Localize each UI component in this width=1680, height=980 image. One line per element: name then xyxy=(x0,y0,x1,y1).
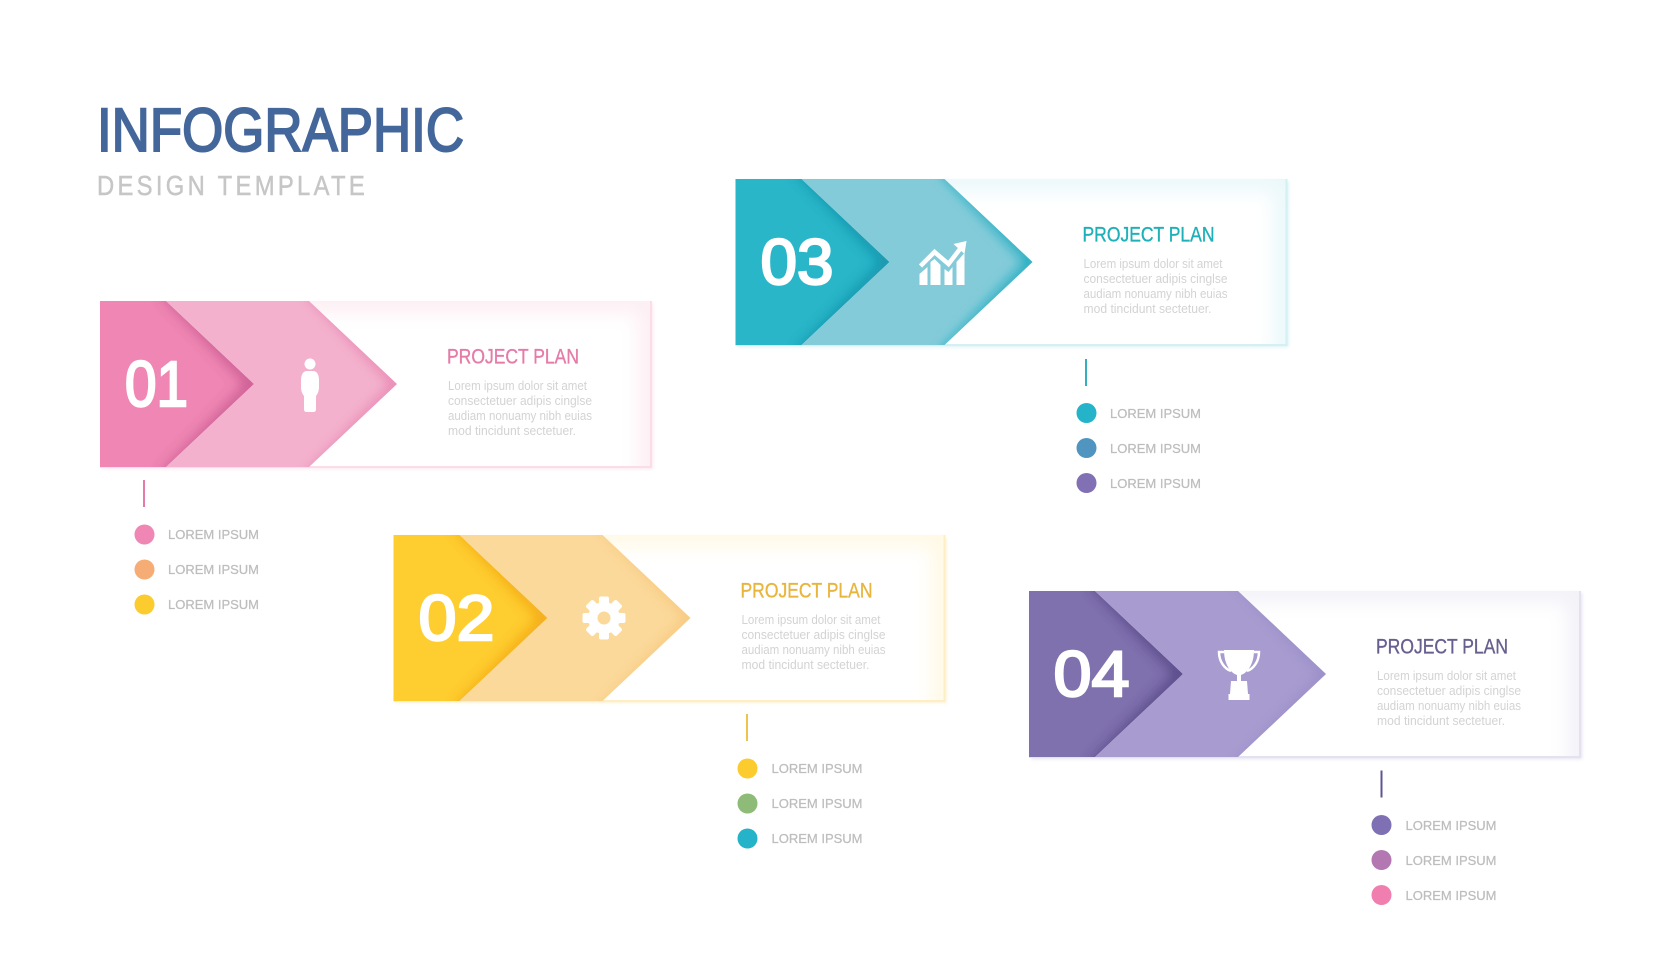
body text: audiam nonuamy nibh euias xyxy=(1084,286,1228,301)
body text: Lorem ipsum dolor sit amet xyxy=(448,378,587,393)
icon: trophy xyxy=(1219,650,1259,700)
body text: audiam nonuamy nibh euias xyxy=(448,408,592,423)
connector and list: step 01: LOREM IPSUM xyxy=(168,597,259,612)
step number 01: 01 xyxy=(125,348,188,420)
body text xyxy=(448,378,592,438)
panel: step 01 xyxy=(100,301,654,470)
step number 02: 02 xyxy=(418,582,494,654)
icon: growth chart xyxy=(920,241,966,285)
heading: PROJECT PLAN xyxy=(740,580,872,602)
body text xyxy=(1084,256,1228,316)
connector and list: step 01: LOREM IPSUM xyxy=(168,527,259,542)
connector and list: step 04 xyxy=(1372,770,1496,905)
connector and list: step 02 xyxy=(738,714,862,848)
connector and list: step 04: LOREM IPSUM xyxy=(1406,888,1496,903)
connector and list: step 02: LOREM IPSUM xyxy=(772,796,862,811)
step number 03: 03 xyxy=(760,226,834,298)
body text: Lorem ipsum dolor sit amet xyxy=(1084,256,1223,271)
body text xyxy=(742,612,886,672)
connector and list: step 03: LOREM IPSUM xyxy=(1110,406,1201,421)
connector and list: step 02: LOREM IPSUM xyxy=(772,831,862,846)
body text: consectetuer adipis cinglse xyxy=(742,627,886,642)
connector and list: step 03: LOREM IPSUM xyxy=(1110,441,1201,456)
subtitle: DESIGN TEMPLATE xyxy=(97,169,365,201)
body text: mod tincidunt sectetuer. xyxy=(1377,713,1505,728)
body text: consectetuer adipis cinglse xyxy=(1084,271,1228,286)
body text: mod tincidunt sectetuer. xyxy=(742,657,870,672)
body text xyxy=(1377,668,1521,728)
heading: PROJECT PLAN xyxy=(1376,636,1508,658)
title: INFOGRAPHIC xyxy=(97,96,464,164)
body text: audiam nonuamy nibh euias xyxy=(742,642,886,657)
body text: consectetuer adipis cinglse xyxy=(1377,683,1521,698)
icon: person xyxy=(301,358,319,412)
connector and list: step 02: LOREM IPSUM xyxy=(772,761,862,776)
icon: gear xyxy=(582,596,626,640)
body text: mod tincidunt sectetuer. xyxy=(448,423,576,438)
panel: step 03 xyxy=(736,179,1290,348)
heading: PROJECT PLAN xyxy=(447,346,579,368)
connector and list: step 03 xyxy=(1076,359,1201,493)
connector and list: step 04: LOREM IPSUM xyxy=(1406,853,1496,868)
panel: step 04 xyxy=(1029,591,1583,760)
step number 04: 04 xyxy=(1054,638,1130,710)
body text: mod tincidunt sectetuer. xyxy=(1084,301,1212,316)
body text: Lorem ipsum dolor sit amet xyxy=(1377,668,1516,683)
connector and list: step 01: LOREM IPSUM xyxy=(168,562,259,577)
body text: Lorem ipsum dolor sit amet xyxy=(742,612,881,627)
connector and list: step 01 xyxy=(134,480,259,614)
connector and list: step 03: LOREM IPSUM xyxy=(1110,476,1201,491)
body text: consectetuer adipis cinglse xyxy=(448,393,592,408)
body text: audiam nonuamy nibh euias xyxy=(1377,698,1521,713)
heading: PROJECT PLAN xyxy=(1082,224,1214,246)
panel: step 02 xyxy=(394,535,948,704)
connector and list: step 04: LOREM IPSUM xyxy=(1406,818,1496,833)
